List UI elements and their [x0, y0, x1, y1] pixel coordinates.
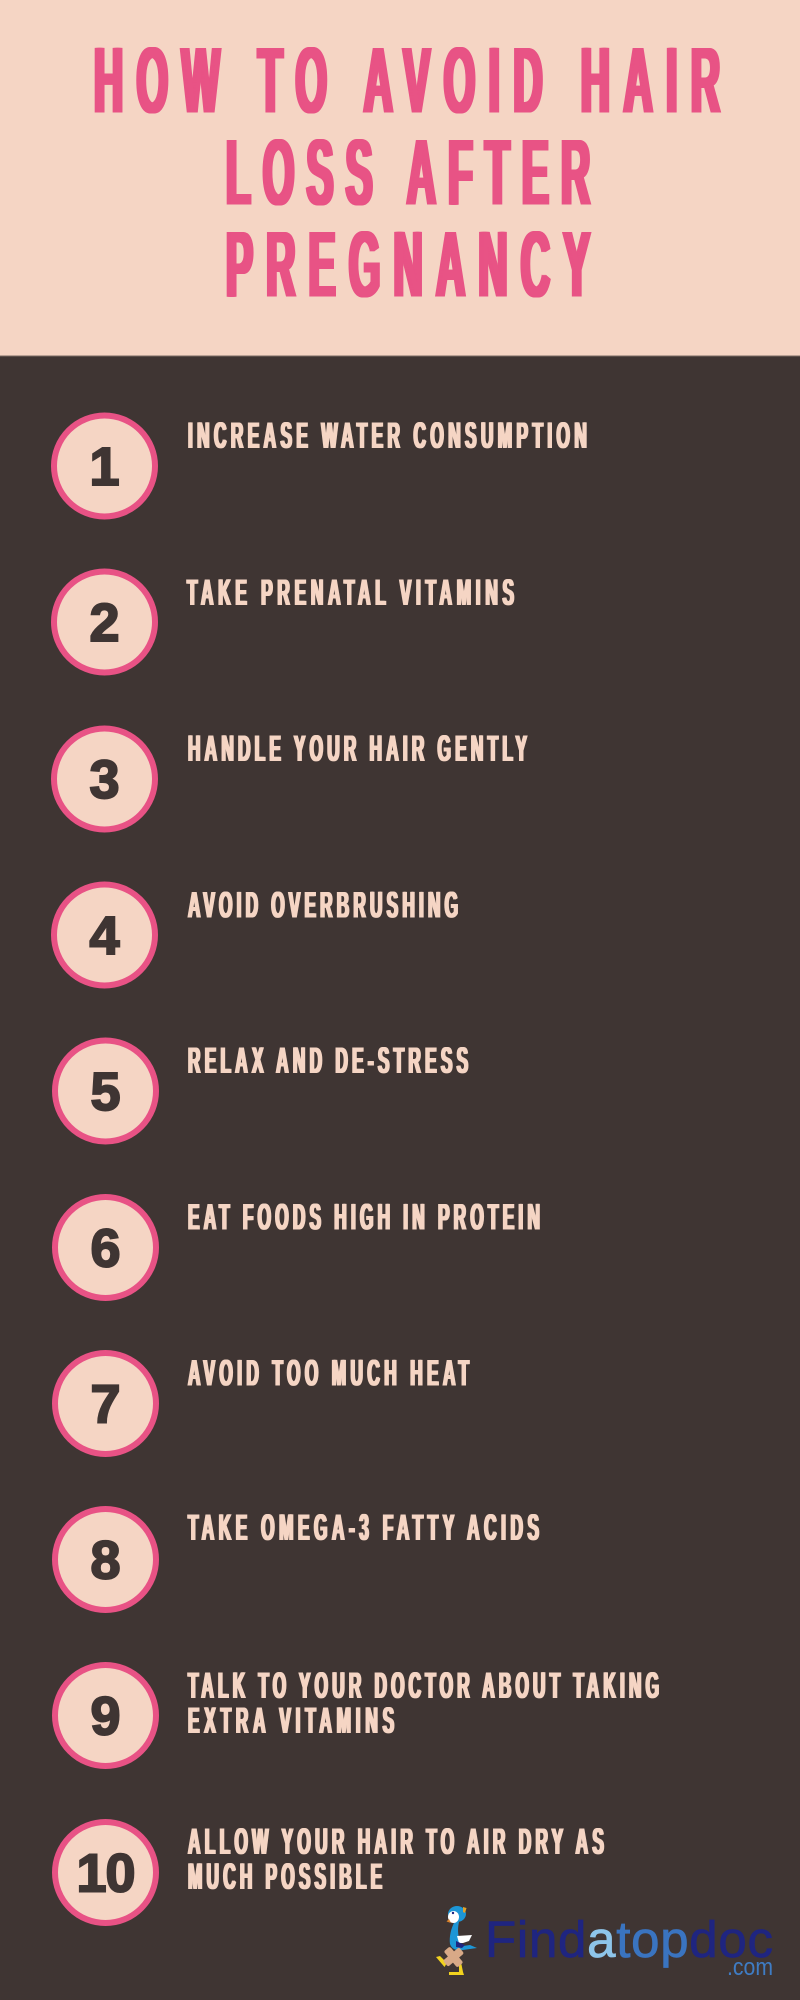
tip 3: [54, 728, 527, 830]
tip 1 text: INCREASE WATER CONSUMPTION: [188, 416, 587, 457]
tip 9: [55, 1665, 659, 1766]
tip 10 text: ALLOW YOUR HAIR TO AIR DRY AS: [188, 1822, 604, 1863]
tip 8: [55, 1508, 539, 1610]
tip 5: [55, 1040, 468, 1142]
logo wordmark: Findatopdoc: [485, 1911, 773, 1968]
title line 2: LOSS AFTER: [226, 121, 590, 225]
number badge 6: 6: [90, 1218, 121, 1278]
tip 4 text: AVOID OVERBRUSHING: [188, 886, 458, 927]
number badge 9: 9: [90, 1686, 121, 1746]
title line 3: PREGNANCY: [226, 213, 590, 317]
number badge 10: 10: [76, 1844, 135, 1904]
number badge 1: 1: [89, 437, 120, 497]
number badge 7: [55, 1353, 156, 1454]
tip 7: [55, 1353, 469, 1454]
tip 9 text: [188, 1666, 659, 1742]
icon: stork mascot: [436, 1906, 477, 1975]
tip 8 text: TAKE OMEGA-3 FATTY ACIDS: [188, 1508, 539, 1549]
tip 2 text: TAKE PRENATAL VITAMINS: [187, 573, 514, 614]
tip 1: [54, 416, 587, 516]
tip 9 text: TALK TO YOUR DOCTOR ABOUT TAKING: [188, 1666, 659, 1707]
number badge 2: 2: [89, 593, 120, 653]
tip 3 text: HANDLE YOUR HAIR GENTLY: [188, 729, 527, 770]
number badge 6: [55, 1197, 156, 1298]
tip 10 text: MUCH POSSIBLE: [188, 1857, 382, 1898]
number badge 5: [55, 1040, 156, 1142]
number badge 5: 5: [90, 1062, 121, 1122]
number badge 3: [54, 728, 155, 830]
panel: title header: [0, 0, 800, 356]
tip 7 text: AVOID TOO MUCH HEAT: [188, 1354, 469, 1395]
tip 6 text: EAT FOODS HIGH IN PROTEIN: [188, 1198, 540, 1239]
logo suffix: .com: [727, 1954, 773, 1981]
number badge 10: [55, 1822, 156, 1923]
number badge 3: 3: [89, 750, 120, 810]
tip 10 text: [188, 1822, 604, 1898]
tip 10: [55, 1822, 604, 1923]
number badge 4: [54, 884, 155, 986]
number badge 4: 4: [89, 906, 120, 966]
tip 9 text: EXTRA VITAMINS: [188, 1701, 394, 1742]
title line 1: HOW TO AVOID HAIR: [94, 29, 720, 133]
number badge 8: 8: [90, 1530, 121, 1590]
number badge 7: 7: [90, 1374, 121, 1434]
tip 2: [54, 572, 514, 672]
number badge 8: [55, 1509, 156, 1610]
number badge 2: [54, 572, 155, 672]
tip 6: [55, 1197, 540, 1298]
tip 5 text: RELAX AND DE-STRESS: [188, 1041, 468, 1082]
logo: Findatopdoc: [436, 1906, 773, 1981]
number badge 1: [54, 416, 155, 516]
number badge 9: [55, 1665, 156, 1766]
tip 4: [54, 884, 458, 986]
